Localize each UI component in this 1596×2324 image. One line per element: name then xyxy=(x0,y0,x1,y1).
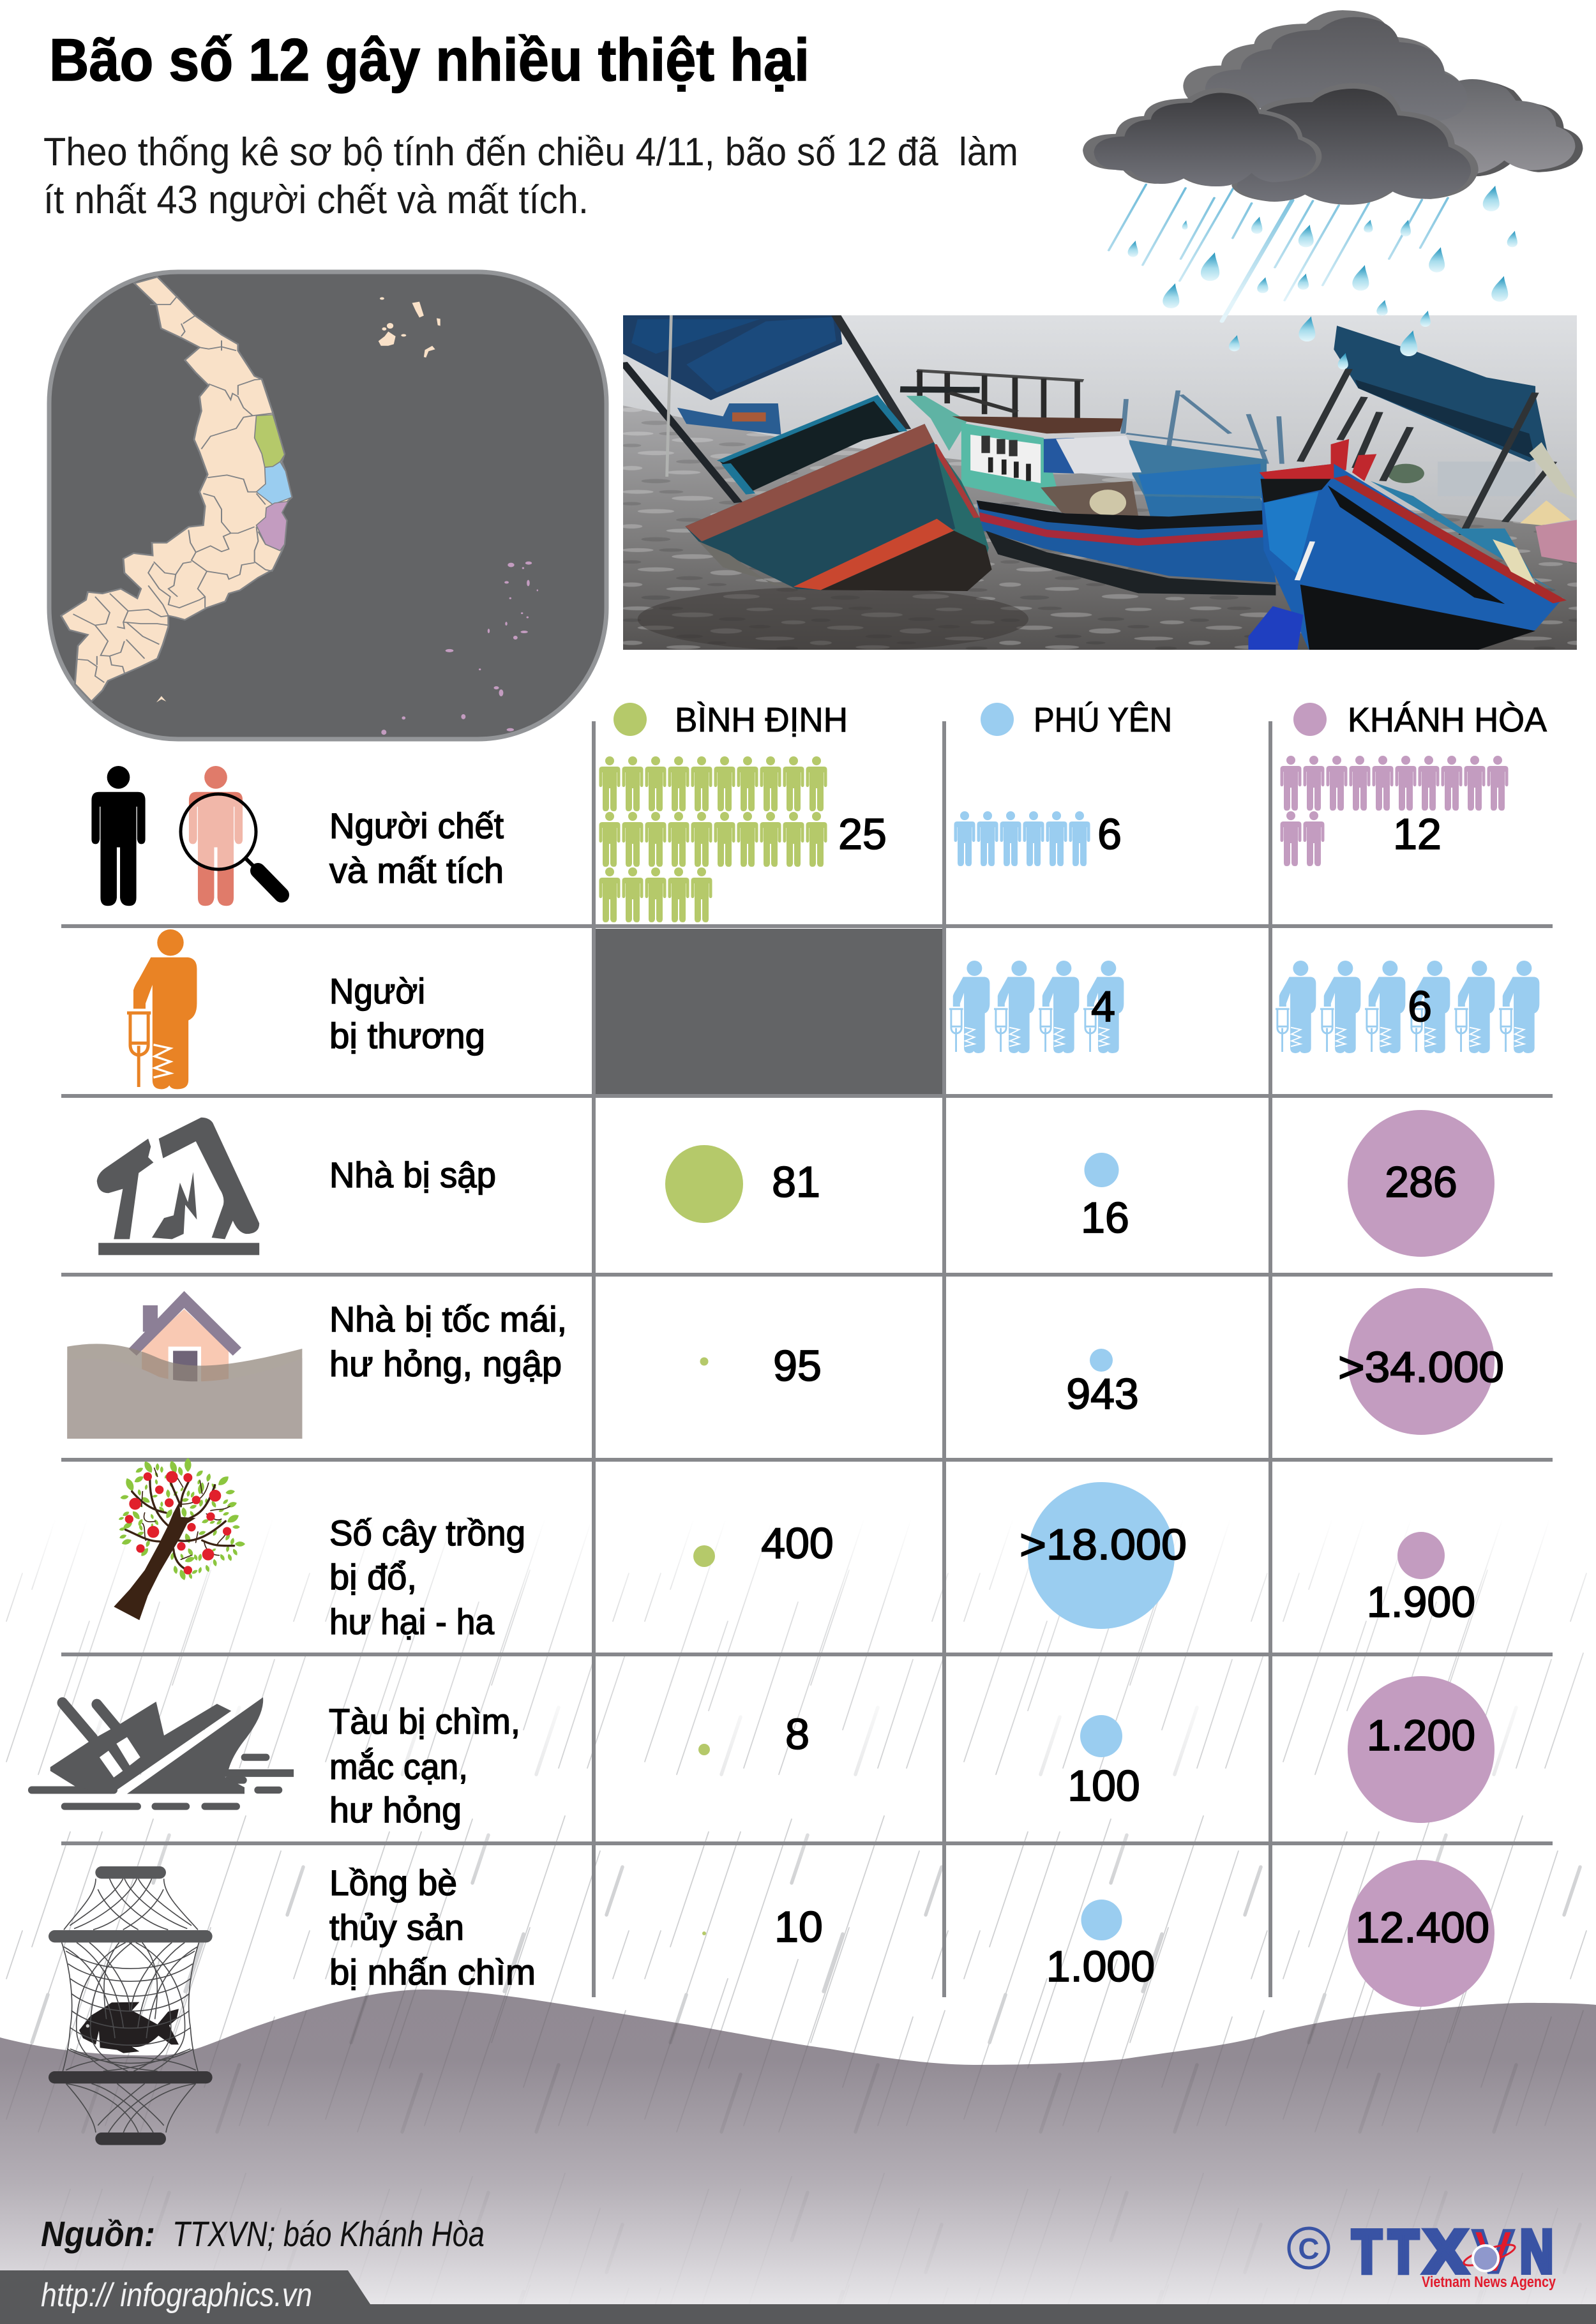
no-data cell: Bình Định injured xyxy=(596,929,942,1094)
map: northern islands xyxy=(156,297,440,702)
pictogram: Bình Định 25 xyxy=(599,756,827,922)
TTXVN letters xyxy=(1352,2218,1553,2286)
intro text xyxy=(43,130,1018,222)
column header: Bình Định: BÌNH ĐỊNH xyxy=(675,701,848,739)
column header: Khánh Hòa: KHÁNH HÒA xyxy=(1348,701,1547,739)
icon: flooded house xyxy=(67,1291,302,1439)
pictogram: Khánh Hòa 12 xyxy=(1281,756,1508,866)
column header: Phú Yên: PHÚ YÊN xyxy=(1034,701,1172,739)
cloud: front centre xyxy=(1231,83,1479,205)
cloud: back right xyxy=(1426,79,1583,176)
apples xyxy=(125,1471,231,1575)
value: Phú Yên ships: 100 xyxy=(1067,1762,1140,1810)
bubble: Bình Định 10 xyxy=(702,1931,706,1935)
label: injured: Người xyxy=(329,971,425,1011)
globe emblem xyxy=(1462,2241,1517,2271)
map: southern islands xyxy=(381,562,538,735)
value: Khánh Hòa ships: 1.200 xyxy=(1367,1711,1475,1760)
cloud: front left xyxy=(1083,88,1321,186)
source line: TTXVN; báo Khánh Hòa xyxy=(172,2214,485,2254)
bubble: Phú Yên 943 xyxy=(1090,1349,1113,1372)
bubble: Bình Định 95 xyxy=(700,1357,709,1366)
rain streaks xyxy=(1109,184,1448,321)
column header: Phú Yên xyxy=(981,701,1172,739)
bubble: Phú Yên 16 xyxy=(1084,1153,1118,1187)
label: collapsed houses: Nhà bị sập xyxy=(329,1155,496,1195)
label: ships: hư hỏng xyxy=(329,1790,462,1830)
website url: http:// infographics.vn xyxy=(41,2277,312,2314)
label: ships: mắc cạn, xyxy=(329,1746,468,1787)
map: Phú Yên xyxy=(257,461,292,505)
label: fish cages: Lồng bè xyxy=(329,1863,457,1903)
map: mainland provinces xyxy=(61,277,292,701)
icon: dead and missing people xyxy=(91,766,282,906)
label: fish cages: bị nhấn chìm xyxy=(329,1952,536,1992)
title: Bão số 12 gây nhiều thiệt hại xyxy=(49,26,809,93)
bubble: Phú Yên 1000 xyxy=(1081,1900,1122,1940)
label: damaged roofs: Nhà bị tốc mái, xyxy=(329,1299,567,1339)
label: damaged roofs: hư hỏng, ngập xyxy=(329,1344,562,1384)
source line xyxy=(41,2214,485,2254)
thin rain streaks background xyxy=(0,1519,1596,2094)
label: trees: bị đổ, xyxy=(329,1557,417,1597)
icon: injured person with crutch xyxy=(127,929,197,1089)
value: Khánh Hòa injured: 6 xyxy=(1408,982,1432,1031)
bubble: Bình Định 400 xyxy=(693,1545,715,1567)
icon: sinking ship xyxy=(32,1697,294,1806)
value: Khánh Hòa trees: 1.900 xyxy=(1367,1578,1475,1626)
value: Khánh Hòa cages: 12.400 xyxy=(1355,1903,1489,1952)
TTXVN letters: X xyxy=(1424,2218,1467,2286)
logo: TTXVN xyxy=(1289,2218,1556,2291)
label: dead and missing: và mất tích xyxy=(329,850,504,890)
bubble: Phú Yên 100 xyxy=(1080,1715,1122,1757)
pictogram: Phú Yên 6 xyxy=(954,811,1090,866)
value: Bình Định roofs: 95 xyxy=(773,1342,822,1390)
label: trees: Số cây trồng xyxy=(329,1513,525,1553)
bubble: Bình Định 81 xyxy=(665,1145,743,1223)
label: ships: Tàu bị chìm, xyxy=(329,1701,520,1741)
bubble: Khánh Hòa 1200 xyxy=(1348,1676,1494,1823)
value: Bình Định deaths: 25 xyxy=(838,810,887,858)
photo: boats stranded after the storm xyxy=(623,313,1582,652)
value: Khánh Hòa collapsed: 286 xyxy=(1385,1158,1457,1206)
TTXVN letters: N xyxy=(1520,2218,1553,2286)
pictogram: Khánh Hòa injured xyxy=(1276,961,1539,1053)
TTXVN letters: V xyxy=(1473,2218,1514,2286)
label: ships xyxy=(329,1701,520,1830)
value: Phú Yên deaths: 6 xyxy=(1097,810,1122,858)
copyright mark: C xyxy=(1298,2232,1320,2265)
label: dead and missing: Người chết xyxy=(329,806,504,846)
intro text: ít nhất 43 người chết và mất tích. xyxy=(43,178,589,222)
grid lines of the table xyxy=(61,721,1553,1997)
icon: collapsed house xyxy=(97,1118,259,1255)
value: Khánh Hòa roofs: >34.000 xyxy=(1338,1343,1504,1391)
cage hoops xyxy=(49,1866,213,2145)
tree branches xyxy=(126,1468,234,1570)
pictogram: Phú Yên injured xyxy=(949,961,1124,1053)
label: trees: hư hại - ha xyxy=(329,1601,495,1642)
net mesh xyxy=(62,1878,199,2133)
bubble: Khánh Hòa 12400 xyxy=(1348,1860,1494,2007)
intro text: Theo thống kê sơ bộ tính đến chiều 4/11, bão số 12 đã làm xyxy=(43,130,1018,174)
bubble: Khánh Hòa 34000 xyxy=(1348,1288,1494,1435)
TTXVN letters: T xyxy=(1352,2218,1381,2286)
value: Phú Yên injured: 4 xyxy=(1091,982,1115,1031)
bubble: Bình Định 8 xyxy=(698,1744,710,1755)
label: injured xyxy=(329,971,485,1056)
label: fish cages: thủy sản xyxy=(329,1907,464,1947)
value: Phú Yên collapsed: 16 xyxy=(1081,1194,1129,1242)
heavy rain streaks background xyxy=(30,1712,1582,2044)
source line: Nguồn: xyxy=(41,2214,155,2254)
label: dead and missing xyxy=(329,806,504,890)
raindrops xyxy=(1128,186,1517,370)
icon: storm clouds and rain xyxy=(1083,10,1583,370)
rain streaks over the ground xyxy=(6,1990,1584,2174)
map: Khánh Hòa xyxy=(257,502,288,551)
bubble: Khánh Hòa 1900 xyxy=(1397,1532,1445,1579)
ground wave with gradient xyxy=(0,1990,1596,2305)
icon: fallen fruit tree xyxy=(114,1458,245,1620)
TTXVN letters: T xyxy=(1389,2218,1419,2286)
value: Bình Định collapsed: 81 xyxy=(772,1158,820,1206)
map: Bình Định xyxy=(255,415,285,467)
tree leaves xyxy=(118,1458,245,1581)
value: Phú Yên trees: >18.000 xyxy=(1020,1520,1187,1569)
fish xyxy=(79,2002,179,2053)
copyright mark xyxy=(1289,2228,1329,2268)
value: Phú Yên roofs: 943 xyxy=(1066,1370,1139,1418)
value: Phú Yên cages: 1.000 xyxy=(1046,1942,1155,1991)
map panel: southern Vietnam xyxy=(49,272,606,739)
value: Khánh Hòa deaths: 12 xyxy=(1393,810,1442,858)
bubble: Phú Yên 18000 xyxy=(1028,1482,1175,1629)
value: Bình Định cages: 10 xyxy=(774,1903,823,1951)
label: damaged roofs xyxy=(329,1299,567,1384)
value: Bình Định ships: 8 xyxy=(785,1710,809,1758)
footer bar xyxy=(0,2270,1596,2324)
tree trunk xyxy=(114,1502,196,1620)
agency tagline: Vietnam News Agency xyxy=(1422,2274,1556,2291)
label: trees xyxy=(329,1513,525,1642)
cloud: back centre xyxy=(1183,10,1468,121)
label: fish cages xyxy=(329,1863,536,1992)
icon: fish cage net xyxy=(49,1866,213,2145)
value: Bình Định trees: 400 xyxy=(761,1519,834,1568)
bubble: Khánh Hòa 286 xyxy=(1348,1110,1494,1257)
label: injured: bị thương xyxy=(329,1016,485,1056)
